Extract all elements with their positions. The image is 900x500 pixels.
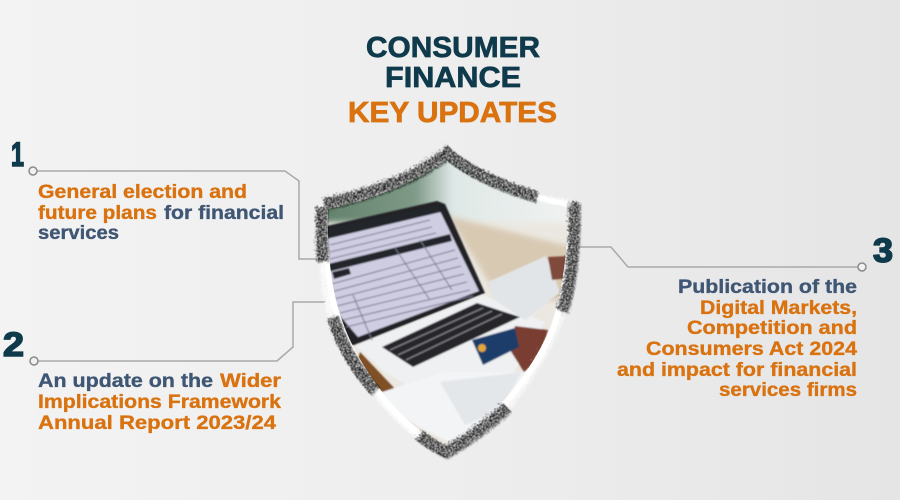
text block 2: Implications Framework (38, 392, 281, 413)
connector 1 (29, 167, 322, 259)
text block 1: General election and (38, 182, 247, 203)
connector 2 (30, 302, 326, 365)
title: KEY UPDATES (348, 97, 557, 129)
text block 1: for financial (164, 203, 284, 224)
text block 3 (617, 277, 857, 401)
title (348, 32, 557, 129)
text block 2: Annual Report 2023/24 (38, 413, 277, 434)
text block 3: Consumers Act 2024 (646, 339, 857, 360)
number 3: 3 (873, 232, 893, 270)
title: CONSUMER (366, 32, 540, 64)
connector 3 (578, 247, 866, 271)
text block 1 (38, 182, 284, 244)
dark brushed shield edges (323, 154, 575, 453)
text block 1: services (38, 223, 119, 244)
photo: laptop and payment card (328, 157, 568, 448)
white brushed shield edge (325, 155, 571, 453)
text block 3: Digital Markets, (700, 298, 857, 319)
text block 3: services firms (719, 380, 857, 401)
text block 1: future plans (38, 203, 157, 224)
shield with laptop photo (315, 150, 580, 460)
text block 2: An update on the (38, 371, 213, 392)
title: FINANCE (385, 62, 521, 94)
number 1: 1 (11, 136, 24, 174)
white brushed shield bottom edges (324, 198, 572, 437)
text block 3: Publication of the (678, 277, 857, 298)
text block 3: Competition and (687, 318, 857, 339)
text block 3: and impact for financial (617, 360, 857, 381)
number 2: 2 (3, 326, 24, 364)
text block 2: Wider (220, 371, 282, 392)
text block 2 (38, 371, 282, 434)
